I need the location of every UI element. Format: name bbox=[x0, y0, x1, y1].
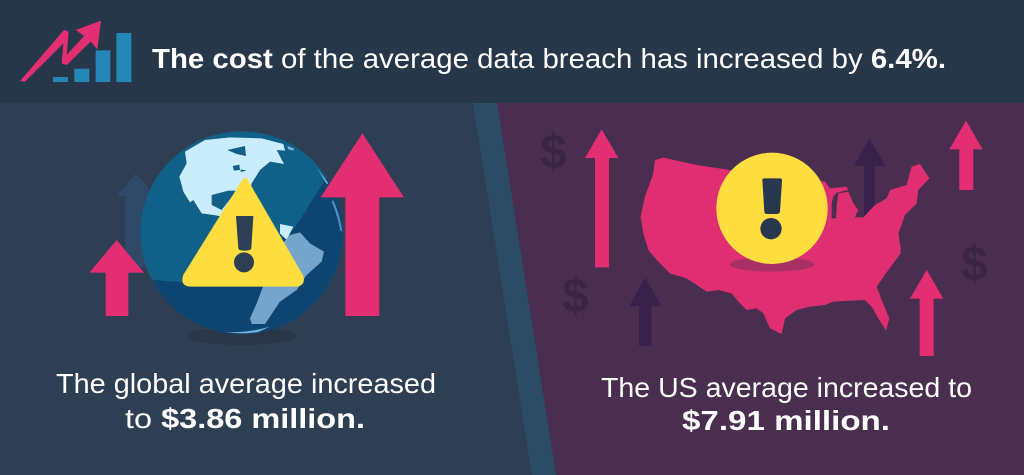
panel: header bbox=[0, 0, 1024, 103]
text: global average: The global average increased bbox=[56, 368, 436, 399]
icon: large pink arrow bbox=[321, 133, 404, 316]
exclamation mark bbox=[762, 178, 782, 214]
icon: arrows bbox=[585, 121, 983, 356]
South America bbox=[280, 224, 293, 240]
icon: dollar signs: $ bbox=[961, 238, 988, 291]
text: global average: to $3.86 million. bbox=[125, 403, 365, 434]
text: US average bbox=[601, 372, 972, 436]
icon: dollar signs bbox=[540, 126, 988, 323]
panel: global average bbox=[0, 103, 545, 475]
icon: globe shadow bbox=[187, 327, 297, 345]
dark arrow behind map bbox=[854, 138, 885, 217]
text: global average bbox=[56, 368, 436, 434]
panel: US average bbox=[473, 103, 1024, 475]
icon: rising chart bbox=[20, 21, 131, 82]
decorative stripe panel bbox=[473, 103, 556, 475]
text: US average: The US average increased to bbox=[601, 372, 972, 403]
icon: dollar signs: $ bbox=[540, 126, 567, 179]
US map bbox=[641, 158, 929, 334]
yellow circle bbox=[716, 153, 828, 264]
icon: globe with warning triangle bbox=[140, 131, 343, 334]
icon: dollar signs: $ bbox=[562, 270, 589, 323]
icon: map and alert bbox=[641, 138, 929, 334]
text: US average: $7.91 million. bbox=[682, 405, 890, 436]
icon: faded arrow behind globe bbox=[117, 173, 149, 267]
warning triangle bbox=[183, 179, 303, 286]
alert shadow bbox=[730, 257, 814, 272]
North America bbox=[179, 137, 285, 220]
title: The cost of the average data breach has increased by 6.4%. bbox=[152, 43, 946, 74]
icon: small pink arrow bbox=[89, 240, 144, 316]
